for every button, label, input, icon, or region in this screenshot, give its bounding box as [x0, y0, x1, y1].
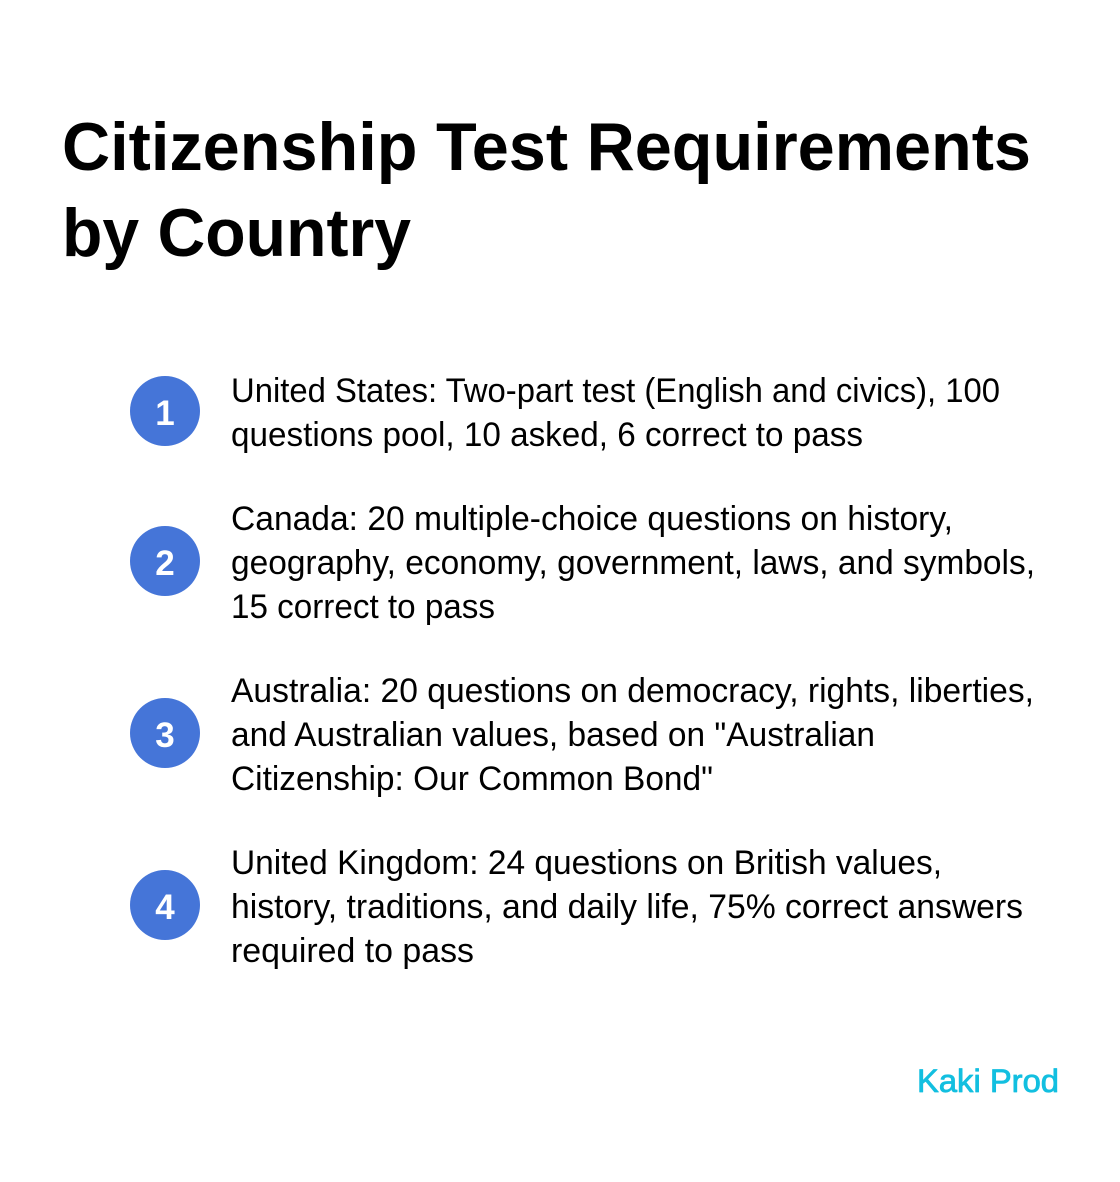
- text: United Kingdom requirements: [231, 844, 1023, 970]
- list item 4: United Kingdom: [130, 844, 1023, 970]
- list item 2: Canada: [130, 500, 1035, 626]
- title: [62, 109, 1031, 271]
- number badge 3: [130, 698, 200, 768]
- text: Canada requirements: [231, 500, 1035, 626]
- text: Australia requirements: [231, 672, 1034, 798]
- text: United States requirements: questions pool, 10 asked, 6 correct to pass: [231, 416, 863, 454]
- text: United Kingdom requirements: history, traditions, and daily life, 75% correct answers: [231, 888, 1023, 926]
- list item 3: Australia: [130, 672, 1034, 798]
- title: by Country: [62, 195, 411, 271]
- number badge 2: [130, 526, 200, 596]
- number badge 4: 4: [155, 888, 175, 927]
- list item 1: United States: [130, 372, 1000, 454]
- text: Australia requirements: and Australian values, based on "Australian: [231, 716, 875, 754]
- text: Canada requirements: 15 correct to pass: [231, 588, 495, 626]
- title: Citizenship Test Requirements: [62, 109, 1031, 185]
- number badge 1: 1: [155, 394, 175, 433]
- text: Australia requirements: Australia: 20 questions on democracy, rights, liberties,: [231, 672, 1034, 710]
- logo: Kaki Prod: Kaki Prod: [917, 1063, 1059, 1099]
- text: Canada requirements: Canada: 20 multiple-choice questions on history,: [231, 500, 953, 538]
- text: United States requirements: United States: Two-part test (English and civics), 100: [231, 372, 1000, 410]
- text: Canada requirements: geography, economy, government, laws, and symbols,: [231, 544, 1035, 582]
- number badge 4: [130, 870, 200, 940]
- text: United Kingdom requirements: United Kingdom: 24 questions on British values,: [231, 844, 942, 882]
- number badge 1: [130, 376, 200, 446]
- text: Australia requirements: Citizenship: Our Common Bond": [231, 760, 713, 798]
- text: United Kingdom requirements: required to pass: [231, 932, 474, 970]
- text: United States requirements: [231, 372, 1000, 454]
- number badge 3: 3: [155, 716, 175, 755]
- number badge 2: 2: [155, 544, 175, 583]
